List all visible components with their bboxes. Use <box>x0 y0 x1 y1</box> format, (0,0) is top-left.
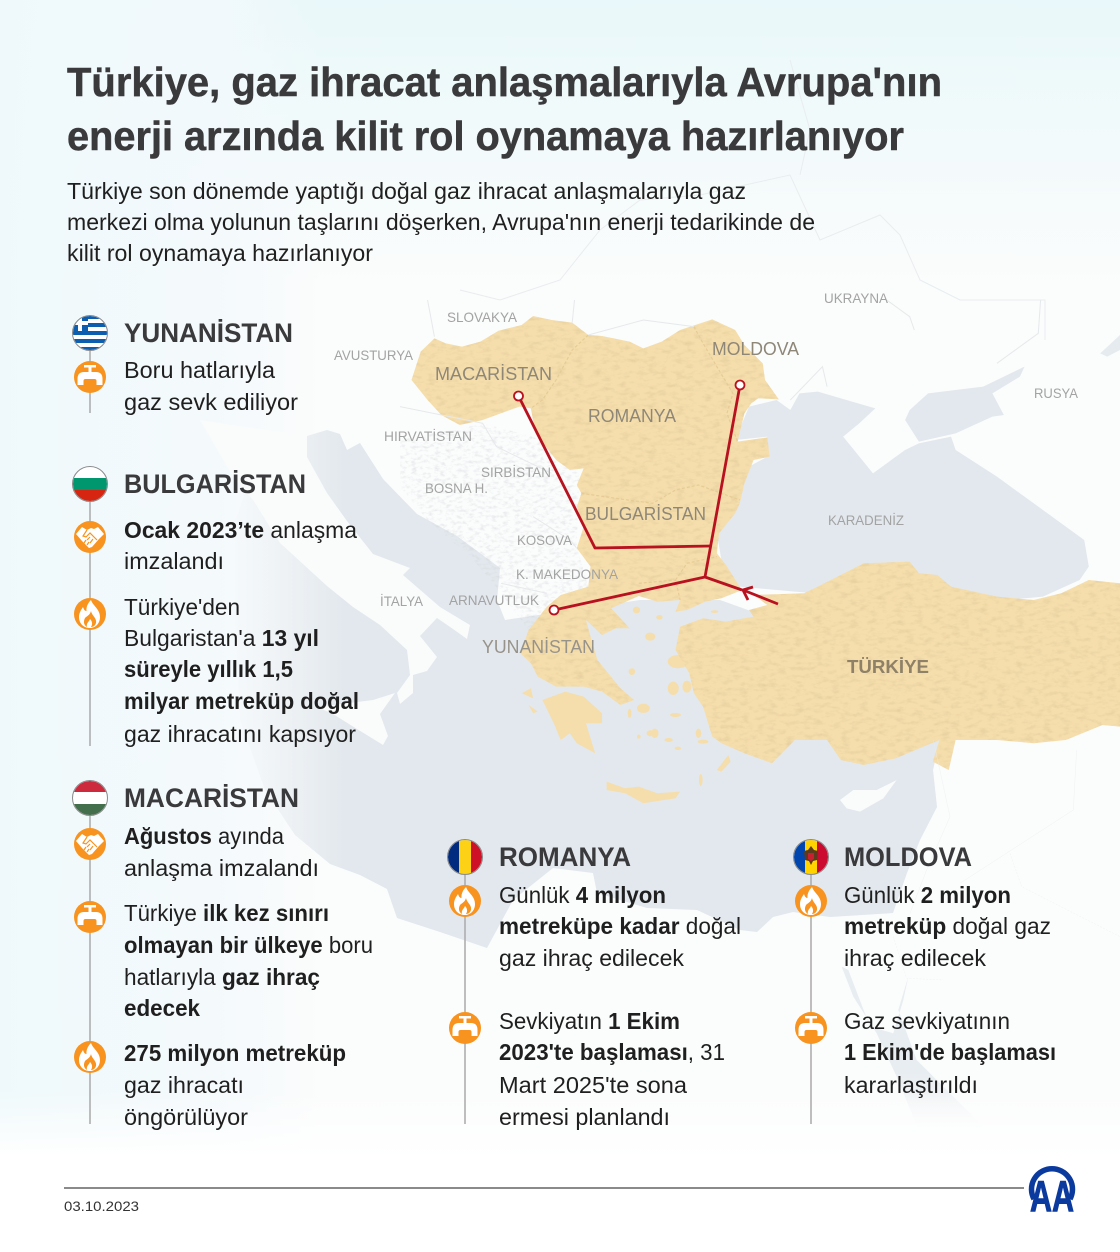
sea: Caspian edge <box>1100 335 1120 357</box>
text block <box>124 823 319 881</box>
labels: map: BULGARİSTAN <box>585 504 706 524</box>
tan land: Greek islands <box>522 607 731 786</box>
text block: Türkiye ilk kez sınırı <box>124 900 329 926</box>
text block: edecek <box>124 995 200 1021</box>
text block <box>844 1008 1056 1098</box>
text block: Günlük 4 milyon <box>499 882 666 908</box>
labels: map: SIRBİSTAN <box>481 463 551 480</box>
labels: map: ROMANYA <box>588 406 676 426</box>
intro text: kilit rol oynamaya hazırlanıyor <box>67 240 373 266</box>
sea: Black Sea <box>717 392 1089 600</box>
flag: Moldova <box>793 839 829 875</box>
text block <box>124 517 357 574</box>
panel: Romanya <box>447 839 741 1130</box>
fade at the bottom of the map <box>0 1090 1120 1160</box>
text block: metreküpe kadar doğal <box>499 913 741 939</box>
labels: map: KOSOVA <box>517 532 573 548</box>
panel: Bulgaristan <box>72 466 359 747</box>
labels: map: MACARİSTAN <box>435 364 552 384</box>
labels: map <box>334 290 1079 677</box>
tan land: Crete <box>607 782 680 803</box>
text block: süreyle yıllık 1,5 <box>124 656 293 682</box>
labels: map: SLOVAKYA <box>447 309 518 325</box>
text block: 1 Ekim'de başlaması <box>844 1039 1056 1065</box>
borders: Middle East <box>893 740 1120 980</box>
flag: Romania <box>447 839 483 875</box>
labels: map: MOLDOVA <box>712 339 799 359</box>
arrow: gas entering from Türkiye <box>743 587 778 604</box>
text block: kararlaştırıldı <box>844 1072 978 1098</box>
labels: map: BOSNA H. <box>425 480 488 496</box>
land: Sicily <box>317 693 395 745</box>
text block: olmayan bir ülkeye boru <box>124 932 373 958</box>
panel: Moldova <box>793 839 1056 1124</box>
text block: gaz ihracatı <box>124 1072 244 1098</box>
pipeline routes <box>514 380 778 614</box>
tan land: Hungary Romania Moldova Bulgaria Greece <box>411 316 779 705</box>
panel: Yunanistan <box>72 315 298 415</box>
flag: Hungary <box>72 780 108 816</box>
icon: flame <box>74 1041 106 1073</box>
labels: map: K. MAKEDONYA <box>516 566 619 582</box>
text block: Ocak 2023’te anlaşma <box>124 517 357 543</box>
text block <box>124 357 298 415</box>
labels: map: UKRAYNA <box>824 290 889 306</box>
sea: Azov <box>905 367 1025 442</box>
text block: hatlarıyla gaz ihraç <box>124 964 320 990</box>
icon: pipe <box>74 361 106 393</box>
text block: Ağustos ayında <box>124 823 284 849</box>
terrain: Balkans and Alps shading <box>400 423 588 630</box>
text block: 275 milyon metreküp <box>124 1040 346 1066</box>
labels: map: KARADENİZ <box>828 511 904 528</box>
heading: MACARİSTAN <box>124 783 299 813</box>
title: Türkiye, gaz ihracat anlaşmalarıyla Avrupa'nın <box>67 59 942 105</box>
borders: north of the map <box>460 60 1045 340</box>
logo: AA <box>1030 1169 1074 1221</box>
text block: imzalandı <box>124 548 224 574</box>
pipeline end point: Yunanistan <box>550 606 558 614</box>
labels: map: İTALYA <box>380 592 424 609</box>
text block: anlaşma imzalandı <box>124 855 319 881</box>
text block <box>124 594 359 747</box>
intro text: merkezi olma yolunun taşlarını döşerken, Avrupa'nın enerji tedarikinde de <box>67 209 815 235</box>
heading: BULGARİSTAN <box>124 469 306 499</box>
borders: tan countries <box>531 327 740 600</box>
map <box>200 60 1120 1167</box>
icon: pipe <box>449 1012 481 1044</box>
labels: map: YUNANİSTAN <box>482 637 595 657</box>
pipeline end point: Macaristan <box>514 392 523 400</box>
title <box>67 59 942 159</box>
logo: AA: AA <box>1030 1172 1074 1221</box>
text block <box>499 1008 725 1130</box>
land: Cyprus <box>840 780 897 812</box>
heading: MOLDOVA <box>844 842 972 872</box>
text block: ermesi planlandı <box>499 1104 670 1130</box>
icon: flame <box>74 598 106 630</box>
icon: handshake <box>74 521 106 553</box>
text block: 2023'te başlaması, 31 <box>499 1039 725 1065</box>
sea: Mediterranean <box>235 430 1000 948</box>
tan land: Turkey <box>676 562 1120 770</box>
text block: öngörülüyor <box>124 1104 248 1130</box>
text block: Gaz sevkiyatının <box>844 1008 1010 1034</box>
text block: Türkiye'den <box>124 594 240 620</box>
text block <box>844 882 1051 971</box>
icon: flame <box>449 885 481 917</box>
text block: gaz sevk ediliyor <box>124 389 298 415</box>
text block: metreküp doğal gaz <box>844 913 1051 939</box>
date: 03.10.2023 <box>64 1198 139 1214</box>
icon: handshake <box>74 828 106 860</box>
text block: Boru hatlarıyla <box>124 357 275 383</box>
labels: map: HIRVATİSTAN <box>384 427 472 444</box>
intro text <box>67 178 815 266</box>
panel: Macaristan <box>72 780 373 1130</box>
sea: Red Sea <box>842 967 997 1167</box>
text block <box>124 900 373 1021</box>
labels: map: ARNAVUTLUK <box>449 592 540 608</box>
text block: milyar metreküp doğal <box>124 688 359 714</box>
labels: map: AVUSTURYA <box>334 347 414 363</box>
text block: ihraç edilecek <box>844 945 986 971</box>
text block <box>124 1040 346 1130</box>
borders: neighbouring countries <box>400 300 1041 593</box>
text block: Mart 2025'te sona <box>499 1072 687 1098</box>
title: enerji arzında kilit rol oynamaya hazırlanıyor <box>67 113 904 159</box>
heading: ROMANYA <box>499 842 631 872</box>
icon: flame <box>795 885 827 917</box>
footer rule <box>64 1187 1024 1189</box>
flag: Bulgaria <box>72 466 108 502</box>
text block <box>499 882 741 971</box>
text block: gaz ihraç edilecek <box>499 945 684 971</box>
labels: map: RUSYA <box>1034 385 1079 401</box>
icon: pipe <box>795 1012 827 1044</box>
text block: Günlük 2 milyon <box>844 882 1011 908</box>
flag: Greece <box>72 315 108 351</box>
icon: pipe <box>74 901 106 933</box>
intro text: Türkiye son dönemde yaptığı doğal gaz ihracat anlaşmalarıyla gaz <box>67 178 746 204</box>
pipeline end point: Moldova <box>736 380 744 390</box>
text block: Bulgaristan'a 13 yıl <box>124 625 319 651</box>
text block: gaz ihracatını kapsıyor <box>124 721 356 747</box>
land: Italy <box>200 420 470 704</box>
text block: Sevkiyatın 1 Ekim <box>499 1008 680 1034</box>
labels: map: TÜRKİYE <box>847 657 929 677</box>
heading: YUNANİSTAN <box>124 318 293 348</box>
tan land: Peloponnese <box>542 692 602 753</box>
